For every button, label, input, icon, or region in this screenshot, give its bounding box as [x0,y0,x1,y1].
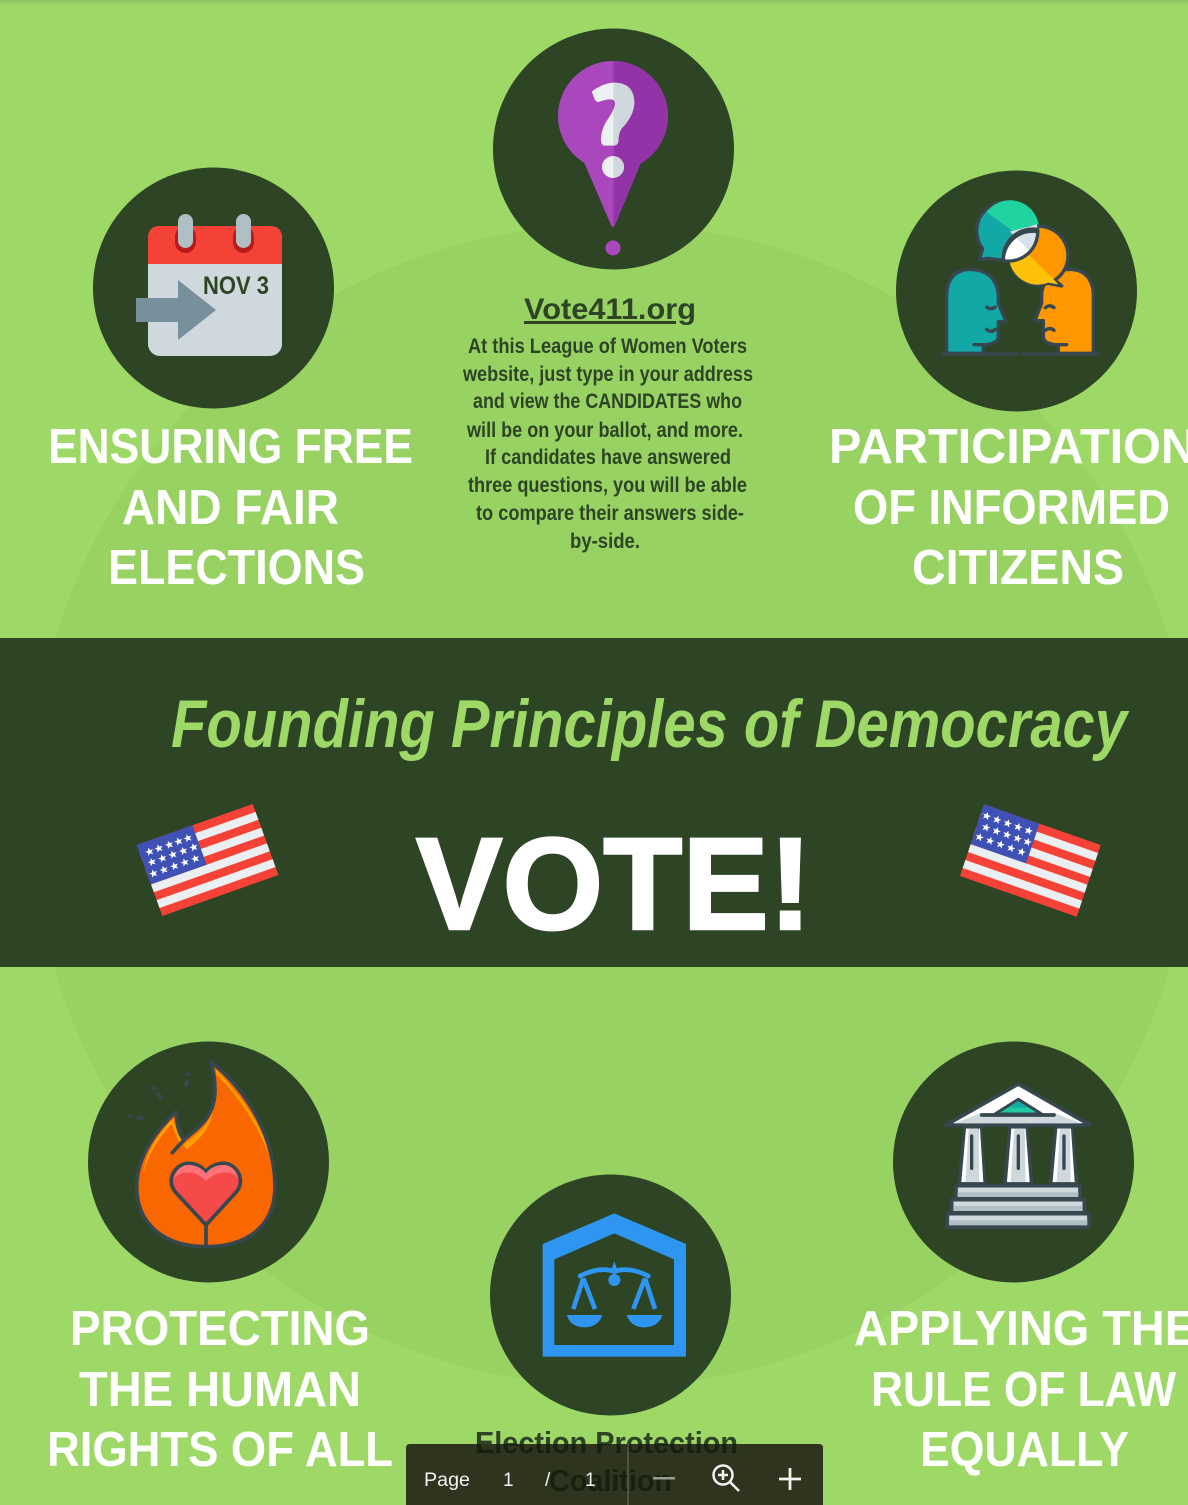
icon: flame with heart [130,1062,275,1247]
heading: RIGHTS OF ALL [47,1423,393,1477]
description: by-side. [570,530,640,553]
description [462,335,753,553]
page indicator: Page [424,1470,470,1491]
icon: calendar [136,214,282,356]
icon: left flag [137,804,278,916]
panel: Vote411 [462,28,753,553]
page indicator: 1 [503,1470,514,1491]
heading [829,420,1188,595]
date: NOV 3 [203,272,269,300]
heading: CITIZENS [912,541,1124,595]
description: website, just type in your address [462,363,753,386]
icon: zoom in [779,1468,801,1490]
link heading: Vote411.org [524,293,696,326]
page toolbar background [406,1444,823,1505]
panel: free and fair elections [48,168,413,595]
icon: temple [946,1084,1090,1227]
icon: magnifier [714,1466,739,1491]
icon: scales in house [543,1213,686,1357]
heading: ENSURING FREE [48,420,413,474]
page indicator: 1 [585,1470,596,1491]
icon: talking heads [943,200,1098,354]
panel: informed citizens [829,170,1188,595]
heading: AND FAIR [122,481,339,535]
icon: zoom out [653,1477,675,1480]
heading: THE HUMAN [79,1363,361,1417]
VOTE headline: VOTE! [416,810,812,957]
heading: Coalition [549,1463,672,1498]
heading [47,1302,393,1477]
description: At this League of Women Voters [468,335,747,358]
description: will be on your ballot, and more. [466,419,743,442]
description: and view the CANDIDATES who [473,390,742,413]
heading: PROTECTING [70,1302,370,1356]
center banner [0,638,1188,967]
icon: question pin [558,61,668,256]
heading: ELECTIONS [108,541,365,595]
description: to compare their answers side- [476,502,744,525]
panel: rule of law [854,1042,1188,1477]
heading: EQUALLY [920,1423,1129,1477]
description: If candidates have answered [485,446,731,469]
page indicator [424,1470,596,1491]
panel: human rights [47,1042,393,1477]
page indicator: / [545,1470,551,1491]
page toolbar controls [424,1444,801,1505]
heading [854,1302,1188,1477]
icon: right flag [960,804,1101,917]
heading: Election Protection [475,1425,738,1460]
heading [48,420,413,595]
heading: OF INFORMED [853,481,1170,535]
heading [475,1425,738,1498]
panel: election protection coalition [475,1174,738,1498]
top edge shading [0,0,1188,6]
background circle [31,224,1188,1386]
description: three questions, you will be able [468,474,747,497]
